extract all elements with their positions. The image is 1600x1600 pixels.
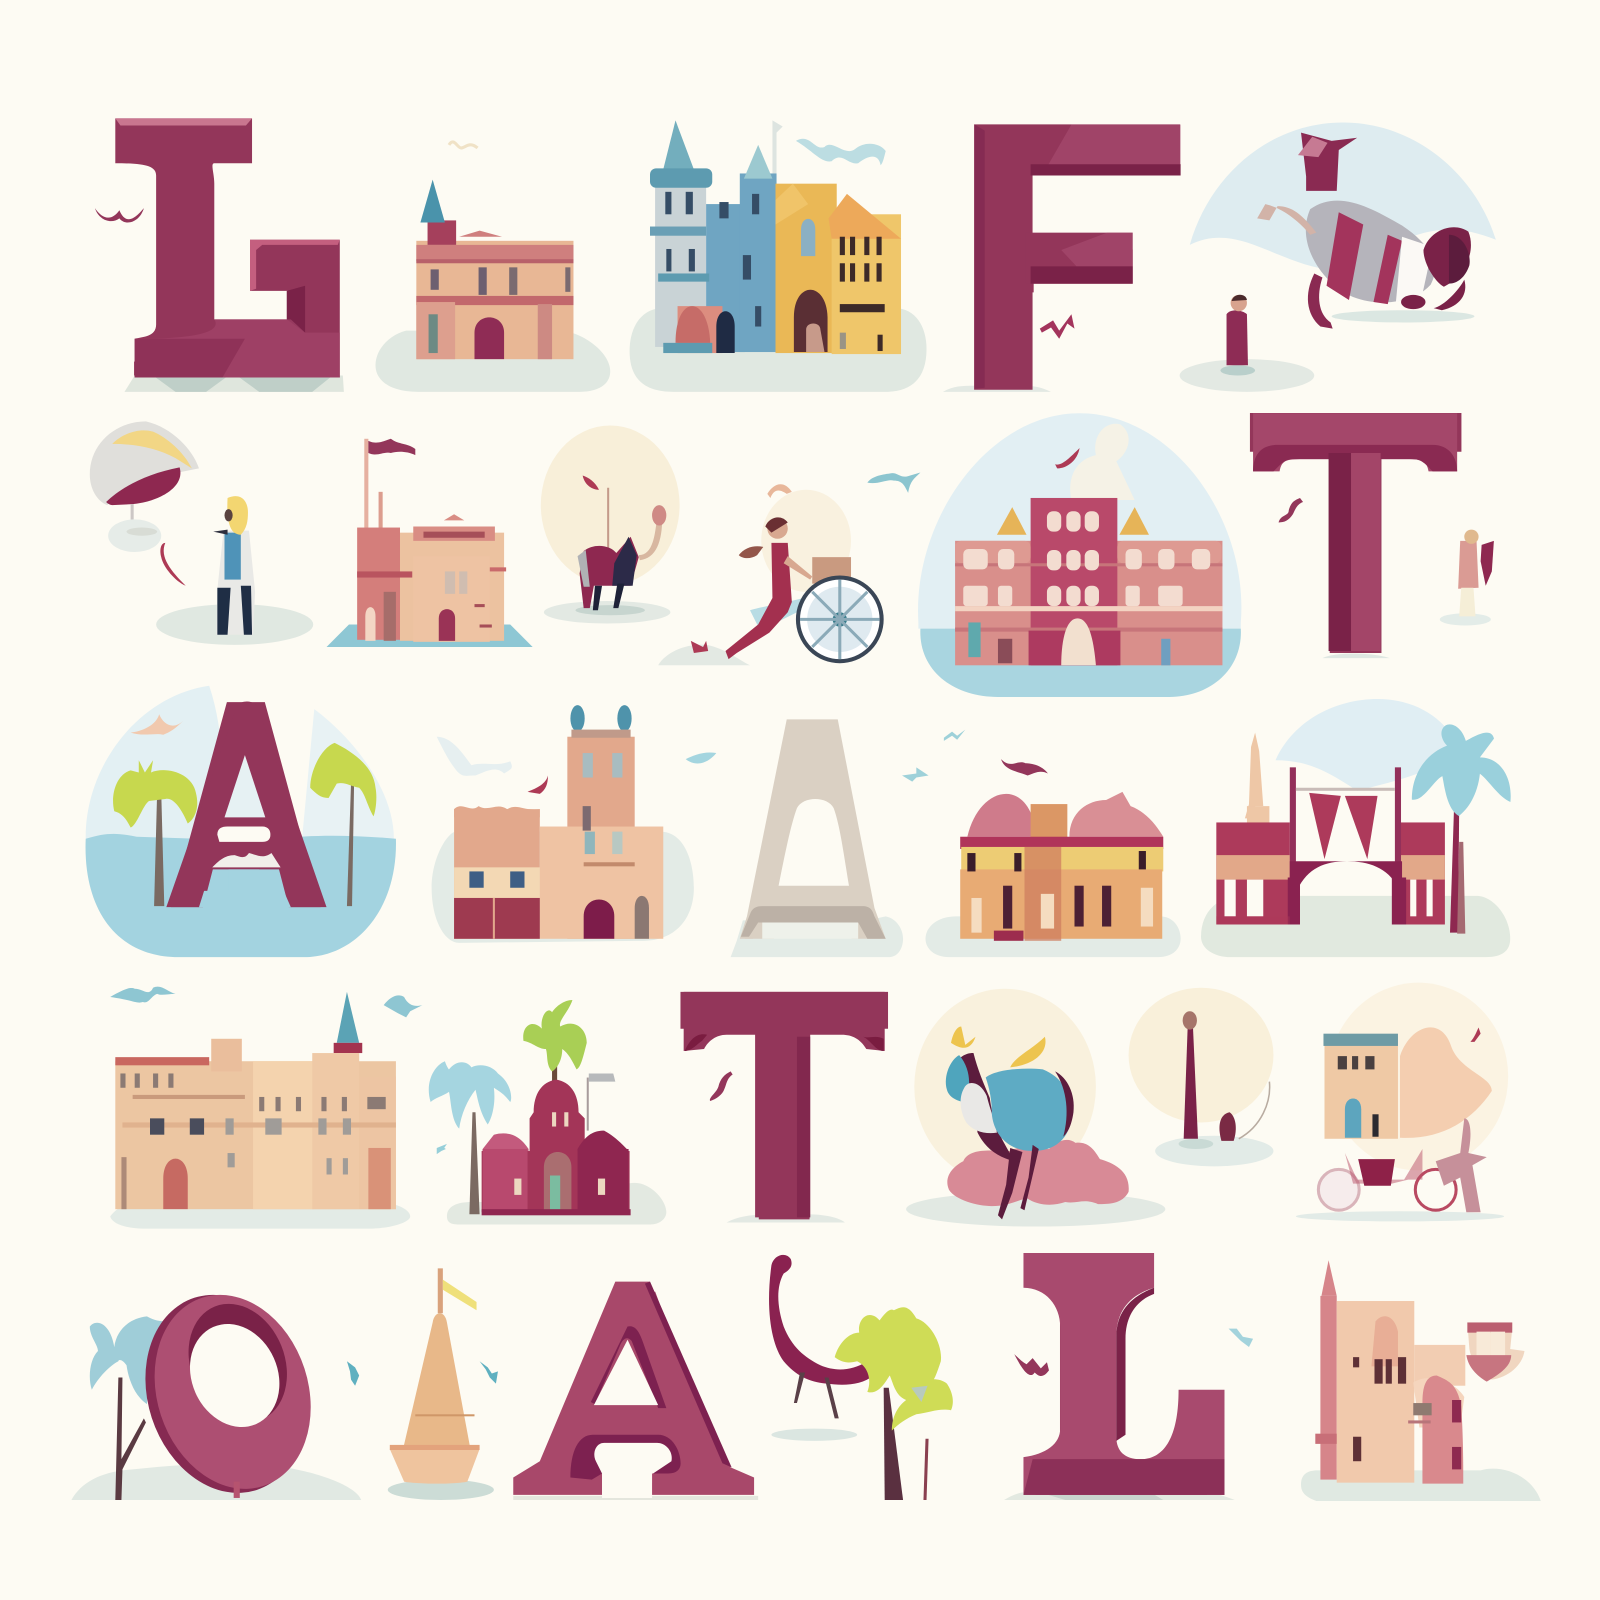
peach house with carriage xyxy=(1296,983,1508,1221)
flag castle on teal base xyxy=(327,439,533,647)
dome with palace xyxy=(918,413,1241,697)
flamingo bird and green palms xyxy=(769,1255,953,1500)
tan castle with tall tower xyxy=(432,705,716,943)
beige letter A xyxy=(731,652,903,1007)
letter O with palm tree: O xyxy=(108,1246,350,1542)
letter T, row 2: T xyxy=(1246,337,1465,727)
wave mark xyxy=(1014,1354,1049,1376)
tan cone tower with flag xyxy=(347,1268,498,1500)
letter A with palms and water xyxy=(86,638,396,971)
pink tower house xyxy=(1301,1260,1541,1501)
letter T, row 4: T xyxy=(677,921,892,1290)
letter F: F xyxy=(947,41,1195,472)
squiggle mark xyxy=(710,1071,733,1101)
letter L, row 5: L xyxy=(1031,1170,1224,1575)
letter A, row 5: A xyxy=(526,1222,742,1561)
small bird mark xyxy=(1229,1329,1253,1347)
zigzag mark xyxy=(1040,314,1074,339)
letter L, row 1: L xyxy=(129,31,343,461)
cream circle with lamp post xyxy=(1129,988,1273,1166)
maroon church with palms xyxy=(429,1000,666,1224)
balloon and blond figure xyxy=(90,421,313,645)
wave mark xyxy=(95,208,144,223)
cyclist with basket and big wheel xyxy=(658,472,920,665)
bridge with banners and palm xyxy=(1201,699,1511,957)
small figure xyxy=(1440,530,1494,626)
tan palace xyxy=(110,987,422,1229)
beige letter A: A xyxy=(740,652,886,1007)
bird marks xyxy=(347,1361,498,1386)
colourful houses on mound xyxy=(630,120,927,392)
standing figure xyxy=(1180,295,1314,392)
letter A with palms and water: A xyxy=(165,638,327,971)
cream circle with camel xyxy=(541,426,680,623)
balloon creature in sky dome with standing figure xyxy=(1180,122,1496,392)
squiggle mark xyxy=(1279,498,1303,522)
domed building with birds xyxy=(902,730,1181,957)
blue bird on rocks xyxy=(906,989,1165,1227)
pink castle on mound xyxy=(376,142,610,392)
